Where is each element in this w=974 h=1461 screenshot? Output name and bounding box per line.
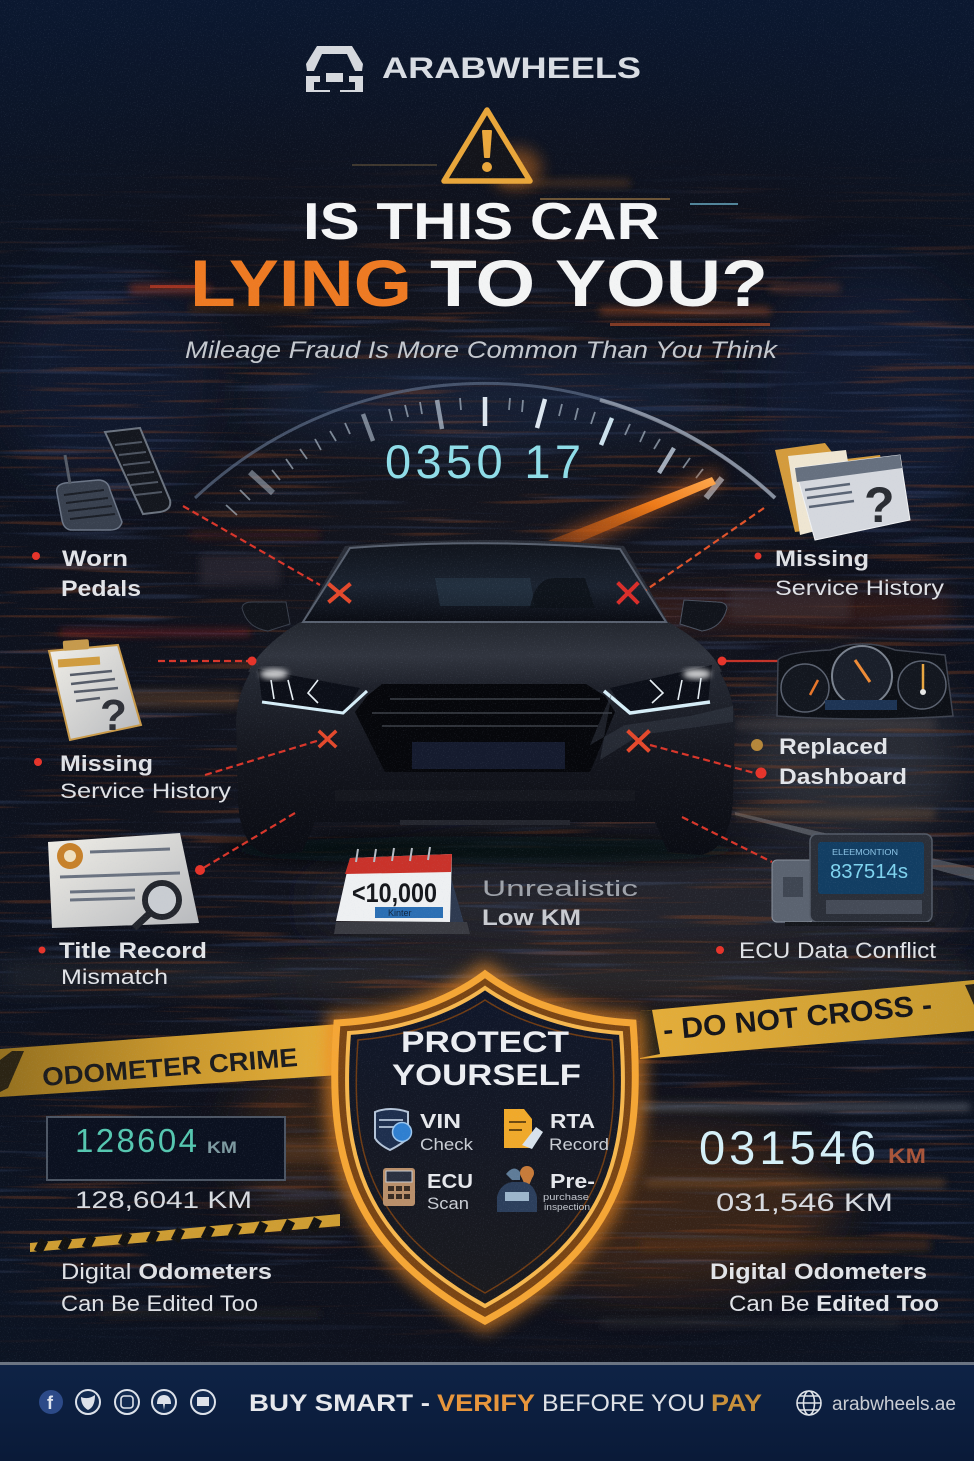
item: pre-purchase inspection xyxy=(497,1166,595,1213)
shield xyxy=(335,974,635,1321)
label: ecu data conflict: ECU Data Conflict xyxy=(739,938,936,963)
label: missing service history left: Service History xyxy=(60,780,232,803)
plate xyxy=(412,742,565,769)
label: replaced dashboard: Dashboard xyxy=(779,764,907,789)
icon: warning triangle xyxy=(444,110,541,188)
slogan: BEFORE YOU xyxy=(542,1390,705,1417)
caption right: Can Be Edited Too xyxy=(729,1291,939,1316)
display box xyxy=(47,1117,285,1180)
item: rta record: Record xyxy=(549,1135,609,1154)
windshield xyxy=(303,543,666,622)
label: worn pedals: Pedals xyxy=(61,576,141,601)
tape: odometer crime: ODOMETER CRIME xyxy=(41,1042,299,1092)
tape: do not cross: - DO NOT CROSS - xyxy=(662,989,933,1047)
item: vin check xyxy=(375,1109,474,1154)
right headlight xyxy=(604,665,712,713)
speedometer gauge xyxy=(195,383,775,542)
icon: clipboard: ? xyxy=(100,691,127,740)
odometer reading: 0350 17 xyxy=(385,435,581,488)
label: title record mismatch: Title Record xyxy=(59,938,207,963)
label: title record mismatch xyxy=(59,938,207,989)
slogan: VERIFY xyxy=(437,1390,535,1417)
heading: PROTECT xyxy=(401,1026,569,1059)
caption left: Can Be Edited Too xyxy=(61,1291,258,1316)
item: rta record xyxy=(504,1109,609,1154)
item: pre-purchase inspection: Pre- xyxy=(550,1171,595,1193)
item: ecu scan: Scan xyxy=(427,1194,469,1213)
title: LYING xyxy=(190,246,412,320)
website: arabwheels.ae xyxy=(832,1394,956,1415)
slogan: PAY xyxy=(711,1390,762,1417)
label: title record mismatch: Mismatch xyxy=(61,966,168,989)
item: vin check: Check xyxy=(420,1135,474,1154)
red X marks xyxy=(320,584,648,750)
printed reading: 128,6041 KM xyxy=(75,1187,252,1214)
label: worn pedals: Worn xyxy=(62,546,128,571)
lower bumper xyxy=(335,790,635,825)
left odometer: KM xyxy=(207,1138,237,1157)
icon: ecu scanner xyxy=(772,834,935,926)
label: missing service history left xyxy=(60,751,232,803)
icon: title document xyxy=(48,833,199,928)
label: missing service history right: Service History xyxy=(775,577,945,600)
label: unrealistic low km: Unrealistic xyxy=(482,876,638,901)
digital reading: 128604 xyxy=(75,1122,197,1159)
label: worn pedals xyxy=(61,546,141,601)
label: unrealistic low km xyxy=(482,876,638,930)
icon: clipboard xyxy=(49,639,141,740)
mirrors xyxy=(242,602,290,631)
hood xyxy=(248,622,722,690)
item: pre-purchase inspection: purchase xyxy=(543,1192,589,1203)
slogan: BUY SMART - xyxy=(249,1390,430,1417)
icon: ecu scanner: ELEEMONTION xyxy=(832,847,898,857)
icon: folder: ? xyxy=(864,477,895,533)
right odometer: KM xyxy=(888,1145,926,1168)
label: missing service history left: Missing xyxy=(60,751,153,776)
item: ecu scan xyxy=(383,1168,473,1213)
icon: pedals xyxy=(57,428,170,530)
item: pre-purchase inspection: inspection xyxy=(544,1202,590,1213)
label: missing service history right: Missing xyxy=(775,546,869,571)
item: ecu scan: ECU xyxy=(427,1171,473,1193)
needle xyxy=(544,470,722,542)
logo mark xyxy=(306,46,363,92)
ticks xyxy=(226,397,722,515)
red callout lines xyxy=(158,506,778,870)
title: IS THIS CAR xyxy=(303,193,660,251)
caption right xyxy=(710,1259,939,1316)
icon: ecu scanner: 837514s xyxy=(830,861,908,883)
website xyxy=(797,1391,956,1415)
caption left: Digital Odometers xyxy=(61,1259,272,1284)
grille xyxy=(355,684,615,772)
label: replaced dashboard: Replaced xyxy=(779,734,888,759)
hazard strip xyxy=(30,1214,340,1252)
icon: folder xyxy=(775,443,910,540)
heading: YOURSELF xyxy=(392,1059,581,1092)
slogan xyxy=(249,1390,762,1417)
title xyxy=(190,193,768,320)
wordmark: ARABWHEELS xyxy=(382,52,641,85)
right odometer xyxy=(699,1121,926,1217)
icon: dashboard xyxy=(777,644,953,719)
logo xyxy=(306,46,641,92)
icon: calendar: <10,000 xyxy=(352,878,437,908)
red dots xyxy=(32,552,766,954)
car body xyxy=(236,540,735,855)
left headlight xyxy=(258,669,367,713)
icon: calendar xyxy=(334,847,470,934)
left odometer xyxy=(47,1117,285,1214)
footer bar xyxy=(0,1362,974,1461)
caption left xyxy=(61,1259,272,1316)
printed reading: 031,546 KM xyxy=(716,1189,893,1217)
label: replaced dashboard xyxy=(779,734,907,789)
digital reading: 031546 xyxy=(699,1121,876,1174)
item: vin check: VIN xyxy=(420,1111,461,1133)
shadow xyxy=(220,836,750,864)
label: missing service history right xyxy=(775,546,945,600)
title: TO YOU? xyxy=(430,246,768,320)
heading xyxy=(392,1026,581,1092)
icon: calendar: Kinter xyxy=(388,908,412,918)
social icons: f xyxy=(47,1393,54,1413)
item: rta record: RTA xyxy=(550,1111,595,1133)
car xyxy=(220,540,750,864)
subtitle: Mileage Fraud Is More Common Than You Think xyxy=(185,337,779,364)
tape: do not cross xyxy=(640,980,974,1059)
label: unrealistic low km: Low KM xyxy=(482,905,581,930)
social icons xyxy=(39,1390,215,1414)
caption right: Digital Odometers xyxy=(710,1259,927,1284)
tape: odometer crime xyxy=(0,1024,340,1097)
